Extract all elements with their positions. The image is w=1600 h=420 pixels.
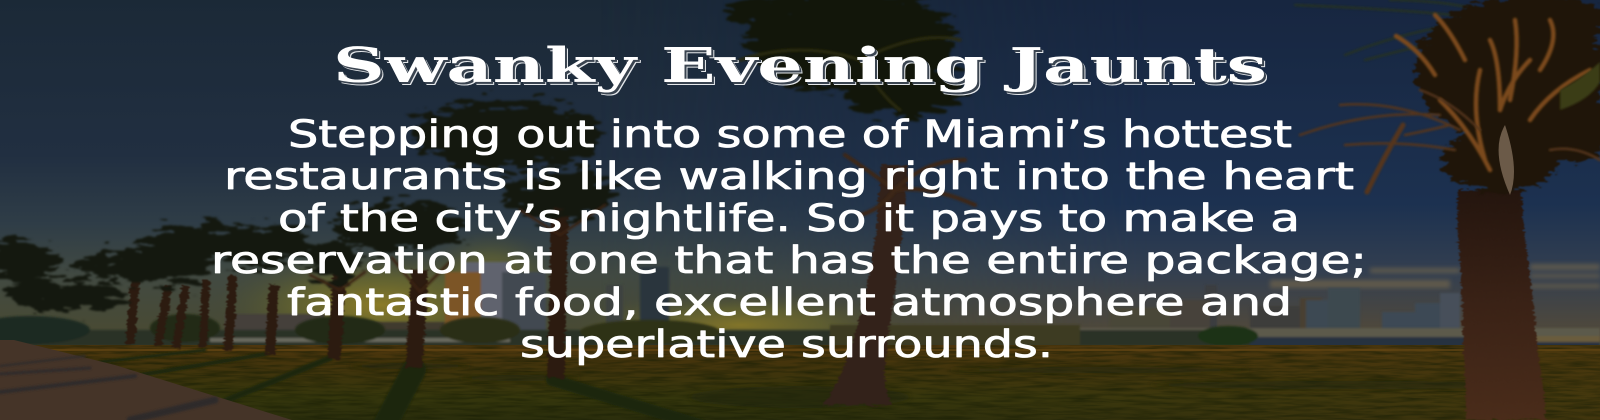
crown fronds <box>740 38 975 215</box>
body paragraph: Stepping out into some of Miami’s hottest <box>288 113 1292 156</box>
fine fronds against the sky <box>1295 0 1500 60</box>
crown upper foliage <box>725 0 965 116</box>
title: Swanky Evening Jaunts: Swanky Evening Jaunts <box>336 41 1270 97</box>
body paragraph: fantastic food, excellent atmosphere and <box>287 281 1292 324</box>
trunk <box>1457 190 1546 420</box>
title: Swanky Evening Jaunts <box>333 38 1270 97</box>
central palm tree <box>725 0 975 405</box>
body paragraph: superlative surrounds. <box>520 323 1053 366</box>
small fronds, left row <box>310 205 605 292</box>
sky <box>0 64 1600 345</box>
right palm tree <box>1295 0 1600 420</box>
grass lawn <box>0 345 1600 420</box>
title: Swanky Evening Jaunts: Swanky Evening Jaunts <box>335 40 1269 96</box>
body paragraph: of the city’s nightlife. So it pays to make a <box>278 197 1300 240</box>
body paragraph <box>211 113 1367 366</box>
title: Swanky Evening Jaunts: Swanky Evening Jaunts <box>333 38 1267 94</box>
row of palm trees <box>0 101 615 378</box>
crown <box>1300 0 1600 195</box>
trunk <box>822 165 908 405</box>
footpath <box>0 340 292 420</box>
tree shadows on the lawn <box>100 350 700 420</box>
skyline buildings <box>225 262 1460 338</box>
palm trunks, left row <box>130 190 560 378</box>
body paragraph: reservation at one that has the entire package; <box>211 239 1367 282</box>
bridge and shoreline <box>0 314 1600 350</box>
palm foliage, left row <box>0 101 615 311</box>
body paragraph: restaurants is like walking right into the heart <box>224 155 1354 198</box>
